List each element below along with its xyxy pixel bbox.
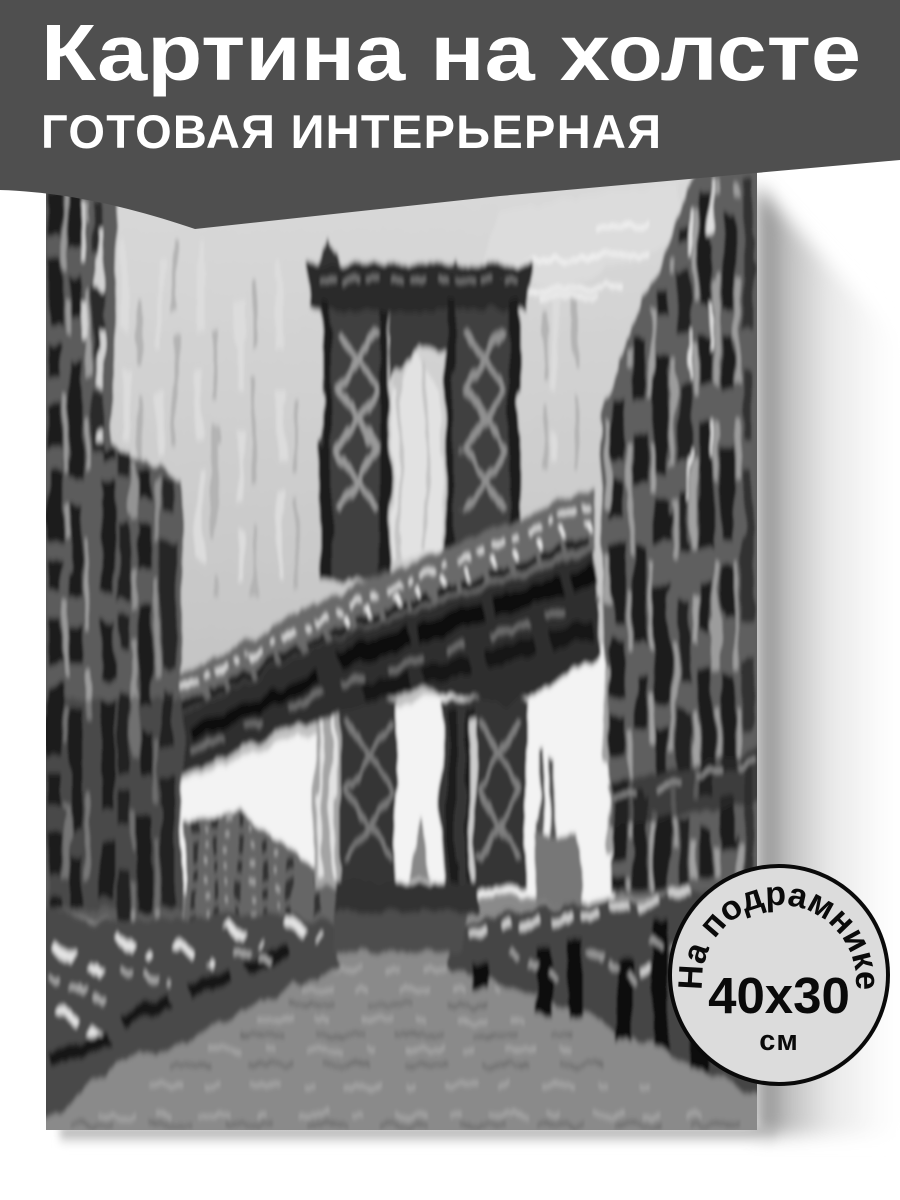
bridge deck bbox=[176, 488, 600, 778]
header banner bbox=[0, 0, 900, 229]
parked cars: left row bbox=[46, 906, 341, 1120]
subtitle: ГОТОВАЯ ИНТЕРЬЕРНАЯ bbox=[41, 105, 661, 158]
size badge bbox=[668, 864, 890, 1086]
tower: lower section bbox=[314, 680, 526, 912]
road bbox=[71, 958, 740, 1130]
painting: Manhattan Bridge street scene bbox=[46, 172, 757, 1130]
distant street vehicles bbox=[335, 912, 465, 952]
badge unit: см bbox=[759, 1025, 799, 1057]
right building bbox=[598, 172, 757, 900]
distant trees bbox=[185, 750, 580, 925]
tower: upper section bbox=[308, 238, 530, 580]
bright sky under the bridge bbox=[170, 645, 615, 900]
badge arc text: На подрамнике bbox=[678, 886, 874, 989]
sky bbox=[108, 178, 696, 782]
left building bbox=[46, 194, 186, 926]
canvas shadow bbox=[60, 185, 900, 1146]
parked cars: right row bbox=[450, 880, 780, 1105]
badge size: 40x30 bbox=[708, 967, 850, 1024]
title: Картина на холсте bbox=[41, 8, 861, 97]
